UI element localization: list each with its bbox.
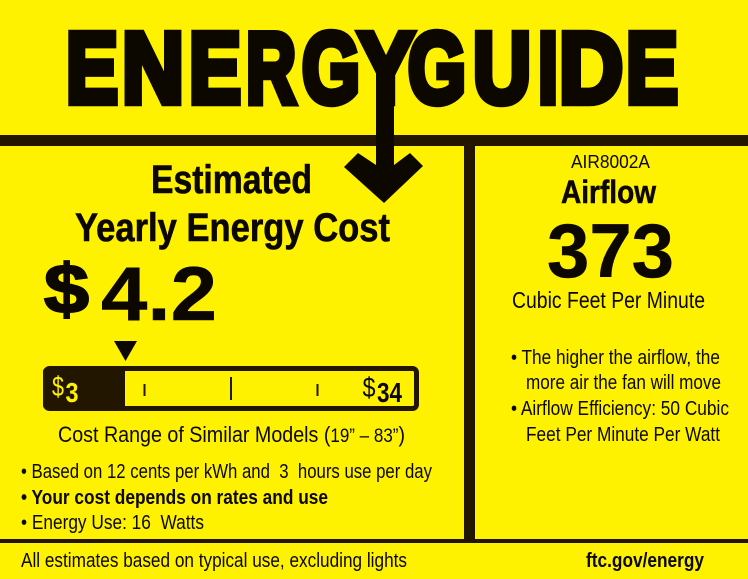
range maximum: 34 xyxy=(377,377,402,408)
title: I xyxy=(538,12,558,124)
cost value xyxy=(44,250,217,337)
range minimum: 3 xyxy=(66,377,78,408)
title: D xyxy=(559,12,623,124)
range maximum: $ xyxy=(362,372,376,403)
left bullet list xyxy=(21,460,433,534)
icon: arrow from title xyxy=(344,66,423,203)
title: E xyxy=(66,12,118,124)
cost value: 4.2 xyxy=(101,252,217,337)
title: E xyxy=(189,12,241,124)
left bullet list: • Based on 12 cents per kWh and 3 hours use per day xyxy=(21,460,433,483)
airflow value: 373 xyxy=(547,209,674,294)
cost value: $ xyxy=(44,250,89,328)
airflow heading: Airflow xyxy=(561,174,656,210)
heading: estimated yearly energy cost: Estimated xyxy=(151,158,312,202)
marker triangle xyxy=(114,341,137,361)
title: G xyxy=(408,12,466,124)
title: R xyxy=(246,12,296,124)
left bullet list: • Energy Use: 16 Watts xyxy=(21,511,204,534)
title: G xyxy=(302,12,360,124)
footer rule xyxy=(0,539,748,543)
range caption: Cost Range of Similar Models (19” – 83”) xyxy=(58,422,405,447)
heading: estimated yearly energy cost: Yearly Energy Cost xyxy=(75,206,390,250)
range minimum: $ xyxy=(52,371,64,402)
right bullet list xyxy=(511,346,729,446)
range minimum xyxy=(52,371,78,408)
title: E xyxy=(626,12,678,124)
header rule xyxy=(0,135,748,146)
title: U xyxy=(473,12,531,124)
cost range bar xyxy=(43,368,416,409)
column divider xyxy=(464,146,475,540)
model number: AIR8002A xyxy=(571,152,650,172)
footer note: All estimates based on typical use, excluding lights xyxy=(21,550,407,572)
title: N xyxy=(122,12,184,124)
title: Y xyxy=(358,12,414,124)
left bullet list: • Your cost depends on rates and use xyxy=(21,486,328,509)
heading: estimated yearly energy cost xyxy=(75,158,390,250)
airflow unit: Cubic Feet Per Minute xyxy=(512,287,705,313)
footer link: ftc.gov/energy xyxy=(586,550,705,572)
range maximum xyxy=(362,372,402,408)
